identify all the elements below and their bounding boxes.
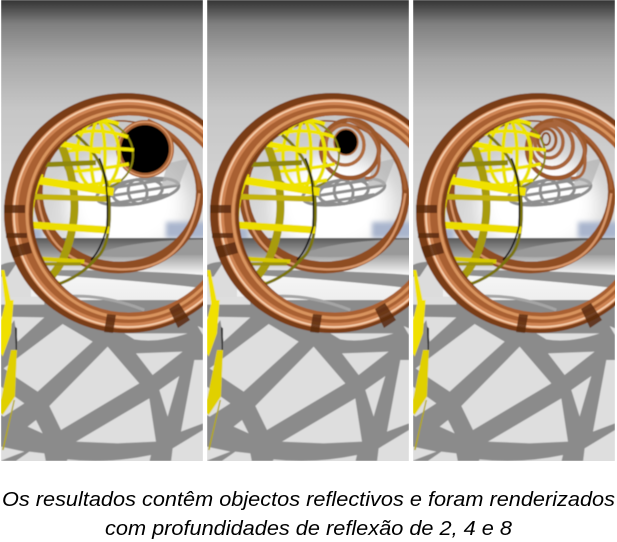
panel: reflection depth 2 [1, 0, 203, 461]
reflected rings: nested tunnel [527, 120, 585, 178]
caption: com profundidades de reflexão de 2, 4 e 8 [105, 518, 512, 540]
panel: reflection depth 8 [413, 0, 617, 462]
reflected rings: small black disc [321, 120, 379, 178]
caption: Os resultados contêm objectos reflectivos e foram renderizados [2, 489, 615, 511]
reflected mirror sphere: black disc [116, 120, 174, 178]
caption [2, 489, 615, 540]
panel: reflection depth 4 [207, 0, 409, 461]
